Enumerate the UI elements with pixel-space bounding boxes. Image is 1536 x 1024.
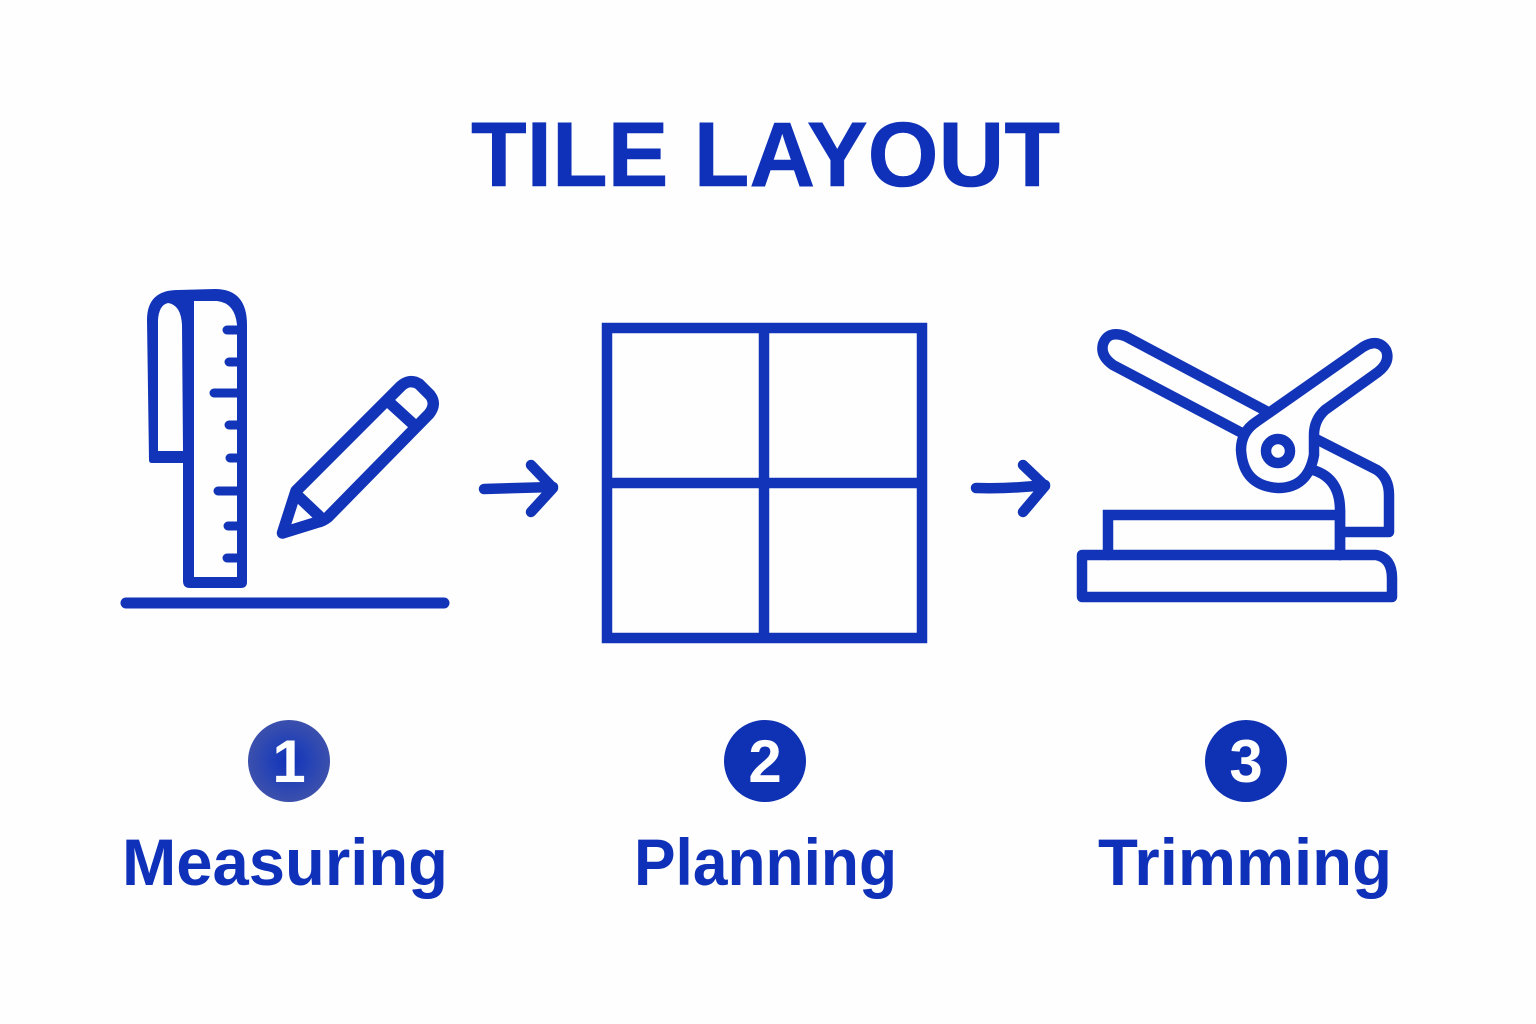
step 1 badge: 1 xyxy=(272,728,306,795)
pivot xyxy=(1266,439,1290,463)
pencil xyxy=(282,382,433,533)
step 2 badge: 2 xyxy=(748,728,782,795)
step 1 label: Measuring xyxy=(122,825,448,899)
tile block xyxy=(1108,515,1340,555)
right handle and pivot housing xyxy=(1241,343,1387,488)
ruler with pen clip xyxy=(147,289,247,588)
step 2 label: Planning xyxy=(634,825,897,899)
step 3 badge xyxy=(1205,720,1287,802)
arrow: measuring to planning xyxy=(484,465,553,512)
cutter arm support xyxy=(1313,440,1389,555)
title: TILE LAYOUT xyxy=(471,104,1060,206)
step 3 badge: 3 xyxy=(1229,728,1263,795)
icon: ruler and pencil (measuring) xyxy=(126,289,444,603)
icon: tile cutter (trimming) xyxy=(1082,334,1392,597)
arrow: planning to trimming xyxy=(976,465,1045,512)
step 2 badge xyxy=(724,720,806,802)
step 1 badge xyxy=(248,720,330,802)
left handle xyxy=(1102,334,1268,432)
base xyxy=(1082,555,1392,597)
baseline xyxy=(126,598,444,608)
step 3 label: Trimming xyxy=(1098,825,1392,899)
icon: four tile grid (planning) xyxy=(607,328,922,638)
